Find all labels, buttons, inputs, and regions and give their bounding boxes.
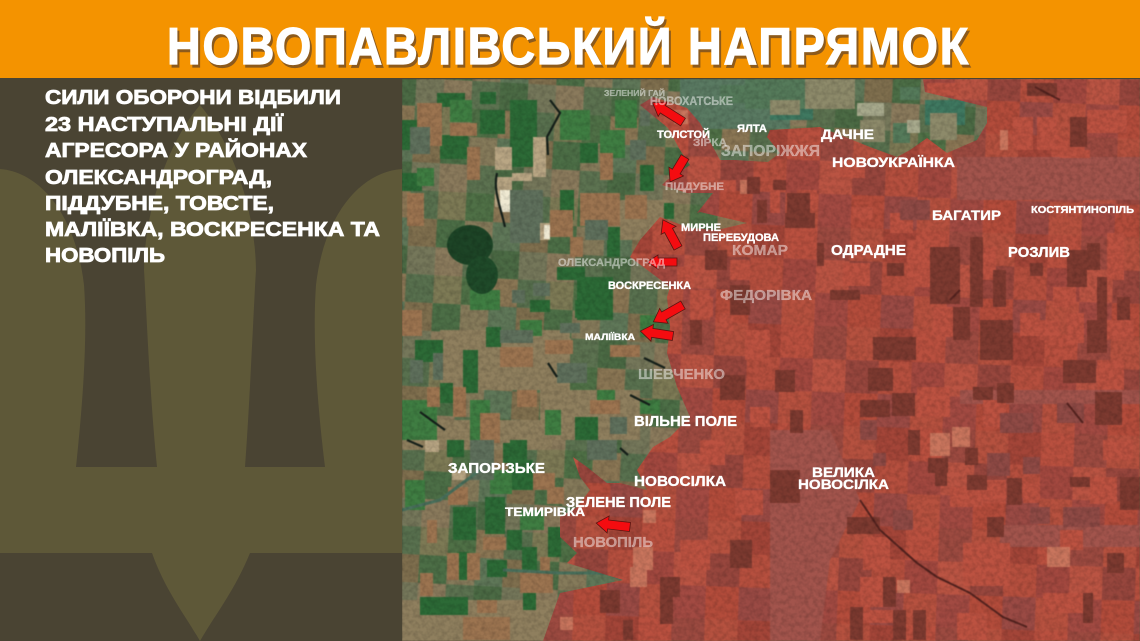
arrow: Novopil (595, 515, 631, 535)
label: Перебудова: ПЕРЕБУДОВА (703, 232, 779, 244)
label: Велика Новосілка (798, 464, 889, 492)
map labels (448, 87, 1134, 551)
label: Воскресенка: ВОСКРЕСЕНКА (608, 280, 691, 292)
northeast muted fields (680, 79, 790, 129)
label: Мирне: МИРНЕ (681, 222, 721, 234)
label: Новохатське: НОВОХАТСЬКЕ (650, 96, 733, 108)
arrow: Maliivka (639, 323, 674, 344)
label: Новоукраїнка: НОВОУКРАЇНКА (832, 154, 955, 170)
label: Олександроград: ОЛЕКСАНДРОГРАД (558, 257, 665, 269)
label: Темирівка: ТЕМИРІВКА (505, 505, 585, 519)
label: Зелений Гай: ЗЕЛЕНИЙ ГАЙ (604, 87, 665, 98)
label: Новопіль: НОВОПІЛЬ (573, 535, 653, 551)
summary text (45, 87, 380, 267)
label: Одрадне: ОДРАДНЕ (831, 242, 906, 259)
map panel (402, 79, 1140, 641)
label: Шевченко: ШЕВЧЕНКО (638, 367, 725, 383)
label: Костянтинопіль: КОСТЯНТИНОПІЛЬ (1031, 204, 1134, 216)
summary text: ОЛЕКСАНДРОГРАД, (45, 167, 272, 189)
summary text: АГРЕСОРА У РАЙОНАХ (45, 138, 308, 162)
summary text: НОВОПІЛЬ (45, 245, 165, 267)
label: Новосілка: НОВОСІЛКА (634, 474, 727, 490)
title: НОВОПАВЛІВСЬКИЙ НАПРЯМОК (167, 17, 970, 76)
summary text: ПІДДУБНЕ, ТОВСТЕ, (45, 193, 274, 215)
label: Вільне Поле: ВІЛЬНЕ ПОЛЕ (634, 414, 737, 430)
label: Запорізьке: ЗАПОРІЗЬКЕ (448, 461, 545, 477)
summary text: СИЛИ ОБОРОНИ ВІДБИЛИ (45, 87, 341, 109)
arrow: Novokhatske (648, 96, 688, 129)
label: Дачне: ДАЧНЕ (821, 126, 874, 142)
attack arrows (595, 96, 692, 535)
label: Велика Новосілка: НОВОСІЛКА (798, 476, 889, 492)
label: Зелене Поле: ЗЕЛЕНЕ ПОЛЕ (566, 495, 671, 511)
label: Ялта: ЯЛТА (737, 123, 767, 135)
summary text: 23 НАСТУПАЛЬНІ ДІЇ (45, 113, 284, 136)
label: Піддубне: ПІДДУБНЕ (665, 181, 724, 193)
label: Зірка: ЗІРКА (693, 137, 727, 149)
satellite terrain (402, 79, 1140, 641)
label: Багатир: БАГАТИР (932, 207, 1001, 223)
occupied territory overlay (543, 79, 1140, 641)
trident emblem watermark (0, 105, 402, 641)
summary text: МАЛІЇВКА, ВОСКРЕСЕНКА ТА (45, 218, 380, 241)
left panel background (0, 78, 402, 641)
title: НОВОПАВЛІВСЬКИЙ НАПРЯМОК (169, 20, 972, 79)
arrow: Piddubne (663, 153, 692, 186)
header bar (0, 0, 1140, 78)
arrow: Myrne (655, 216, 685, 252)
label: Запоріжжя: ЗАПОРІЖЖЯ (721, 143, 820, 160)
label: Комар: КОМАР (732, 242, 788, 259)
label: Розлив: РОЗЛИВ (1008, 245, 1070, 261)
label: Маліївка: МАЛІЇВКА (585, 332, 635, 343)
arrow: Oleksandrohrad (647, 255, 677, 269)
label: Велика Новосілка: ВЕЛИКА (812, 464, 875, 480)
label: Толстой: ТОЛСТОЙ (657, 128, 710, 141)
label: Федорівка: ФЕДОРІВКА (720, 288, 813, 304)
arrow: Voskresenka (649, 298, 687, 329)
